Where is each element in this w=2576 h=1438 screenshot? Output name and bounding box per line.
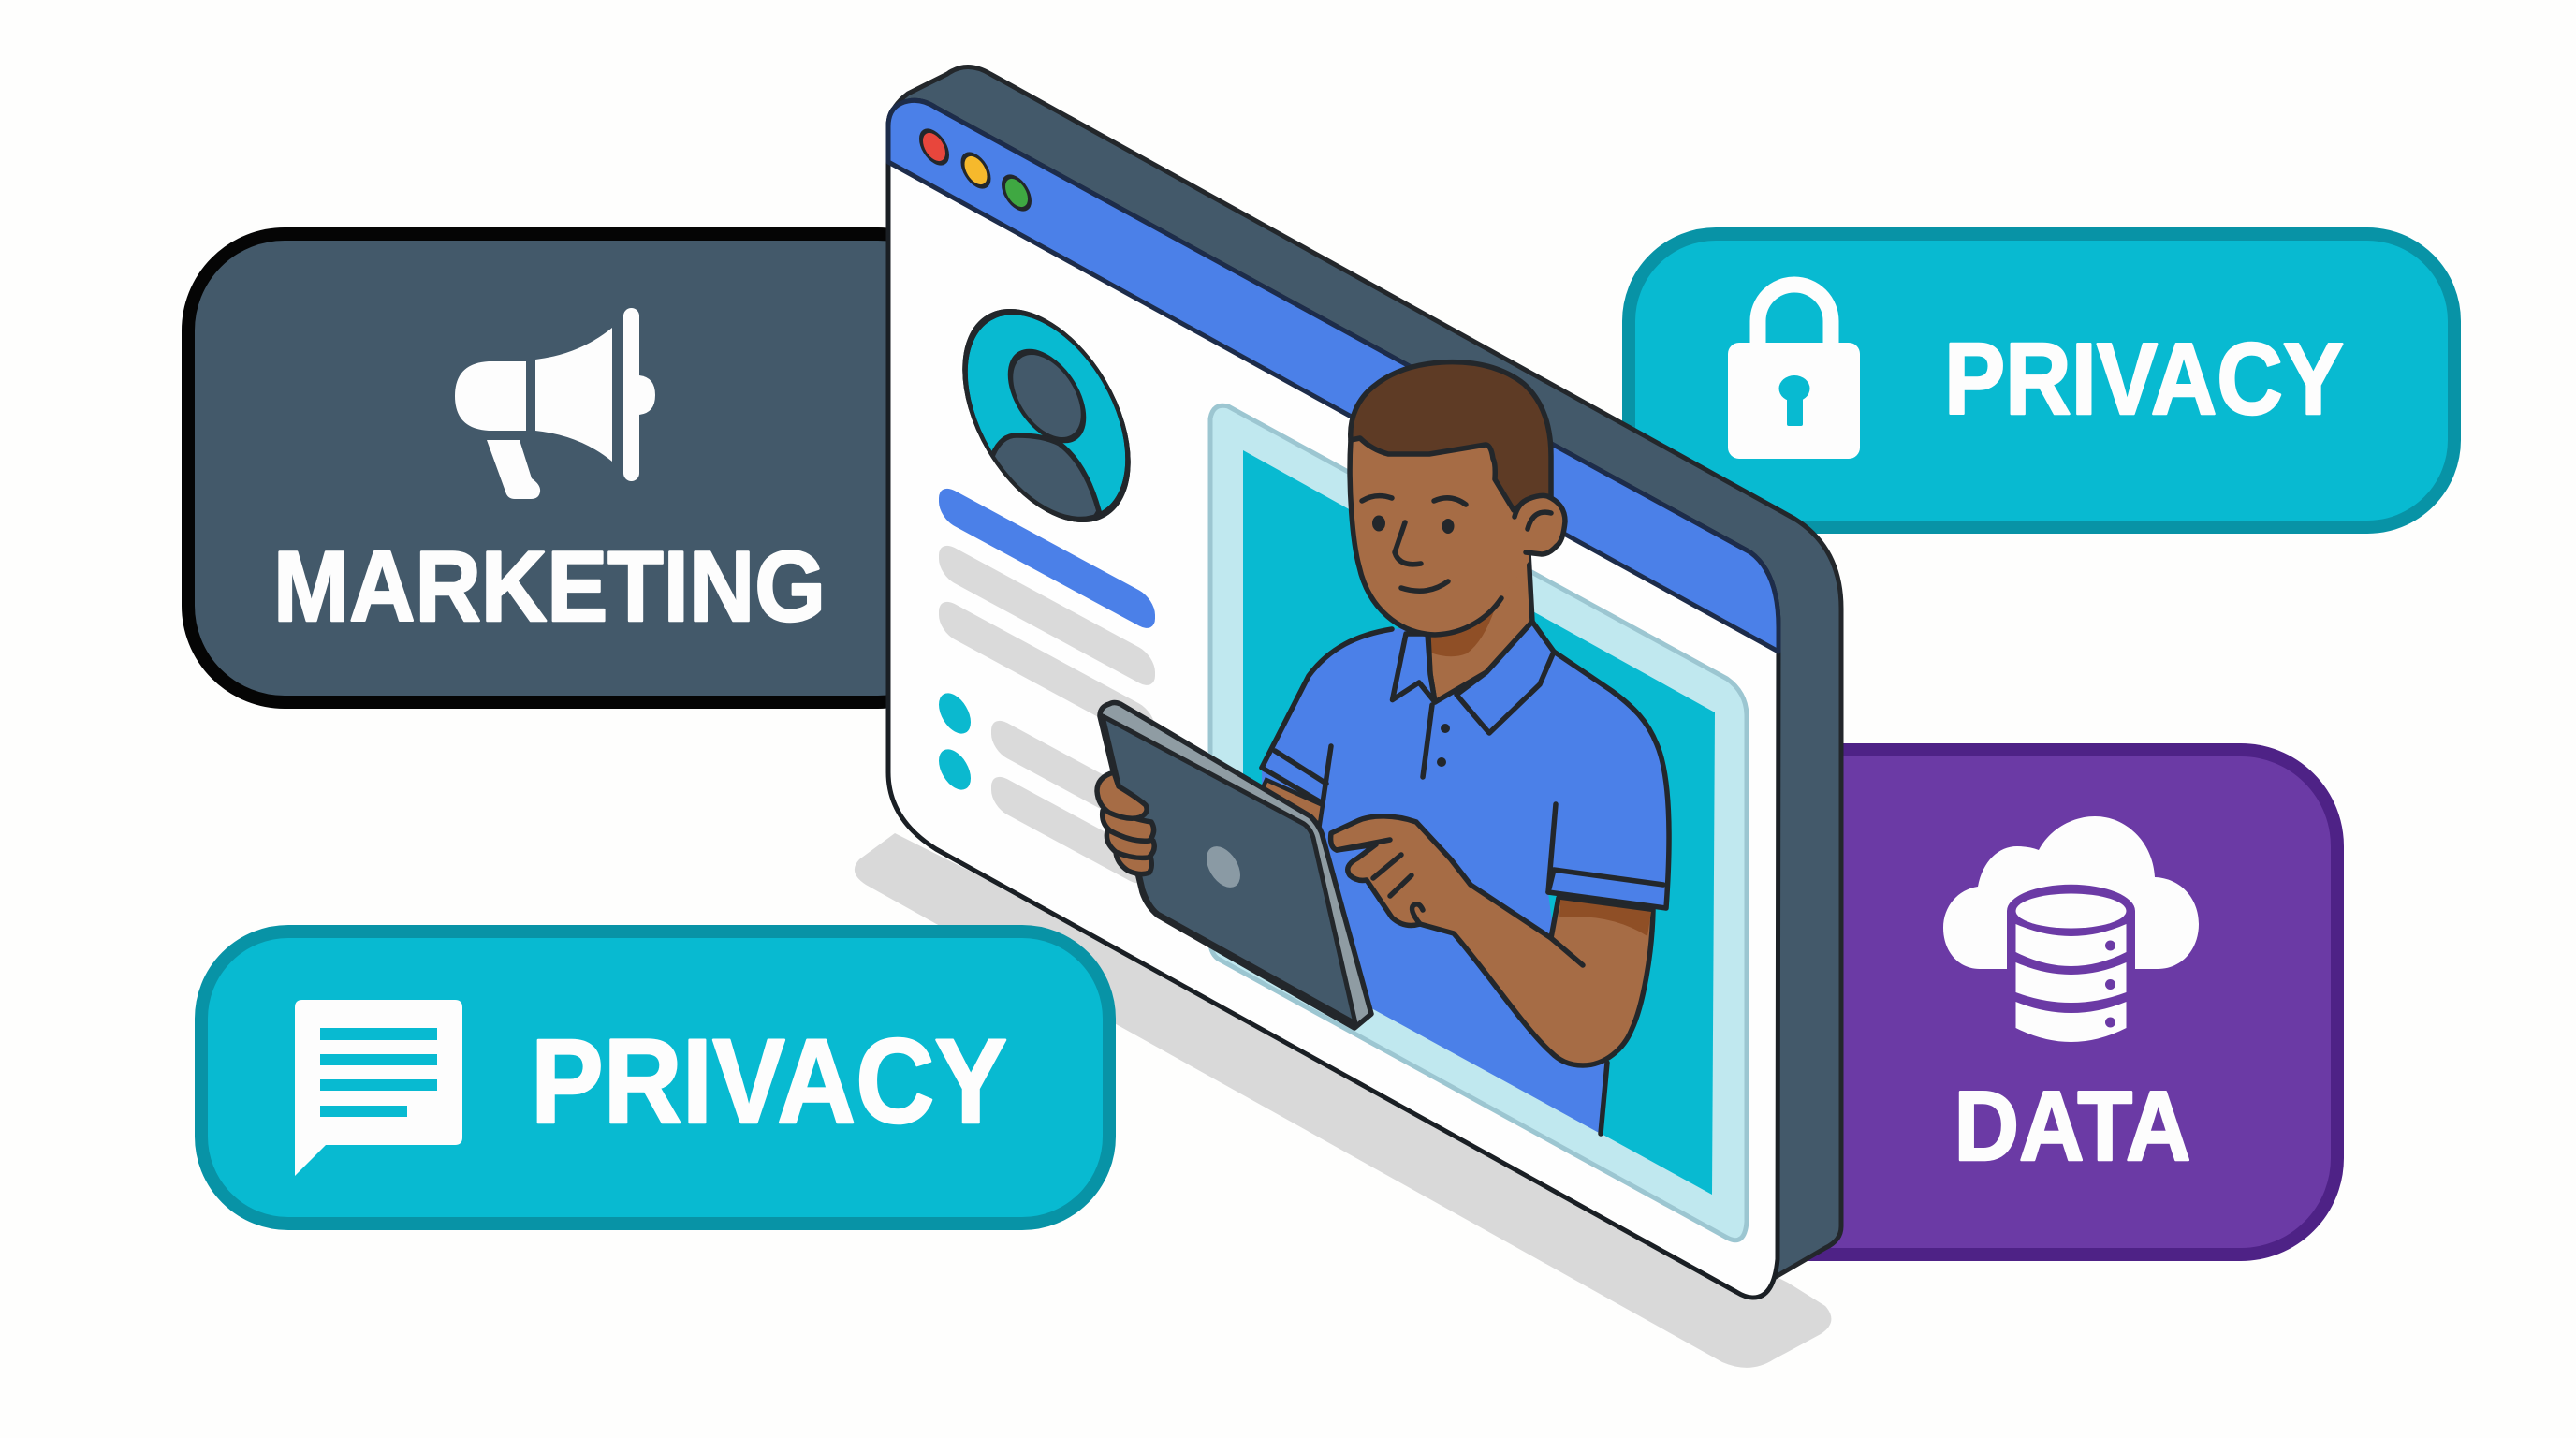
label: privacy: PRIVACY: [1944, 322, 2344, 436]
profile avatar: [962, 309, 1131, 522]
left forearm: [1259, 780, 1323, 824]
browser window: [888, 67, 1841, 1298]
shirt: [1262, 622, 1669, 1134]
profile text lines: [939, 482, 1155, 889]
ear: [1515, 495, 1565, 554]
browser title bar: [888, 100, 1778, 652]
hair: [1351, 362, 1551, 510]
icon: chat bubble: [295, 1000, 462, 1176]
face: [1350, 412, 1535, 635]
panel: privacy top right: [1629, 234, 2454, 527]
panel: data: [1685, 750, 2337, 1255]
browser drop shadow: [855, 833, 1831, 1368]
eyebrows: [1362, 496, 1392, 501]
panel: privacy bottom left: [201, 932, 1109, 1224]
right arm and pointing hand: [1331, 816, 1653, 1065]
left hand: [1097, 772, 1154, 874]
head: [1350, 362, 1565, 635]
icon: padlock: [1728, 285, 1860, 459]
label: privacy: PRIVACY: [531, 1015, 1007, 1149]
browser side wall: [888, 67, 1841, 1281]
nose: [1395, 522, 1421, 565]
collar: [1393, 622, 1554, 733]
neck: [1427, 548, 1532, 702]
icon: cloud database: [1943, 816, 2199, 1049]
label: data: DATA: [1954, 1071, 2190, 1181]
panel: marketing: [188, 234, 974, 702]
icon: megaphone: [455, 308, 655, 499]
eyes: [1372, 515, 1385, 532]
photo frame: [1210, 405, 1747, 1240]
window buttons: [921, 125, 1030, 214]
list bullets: [939, 686, 971, 797]
label: marketing: MARKETING: [273, 530, 826, 642]
person: [1097, 362, 1669, 1134]
browser front face: [888, 100, 1778, 1298]
mouth: [1401, 581, 1448, 591]
tablet: [1100, 702, 1371, 1028]
